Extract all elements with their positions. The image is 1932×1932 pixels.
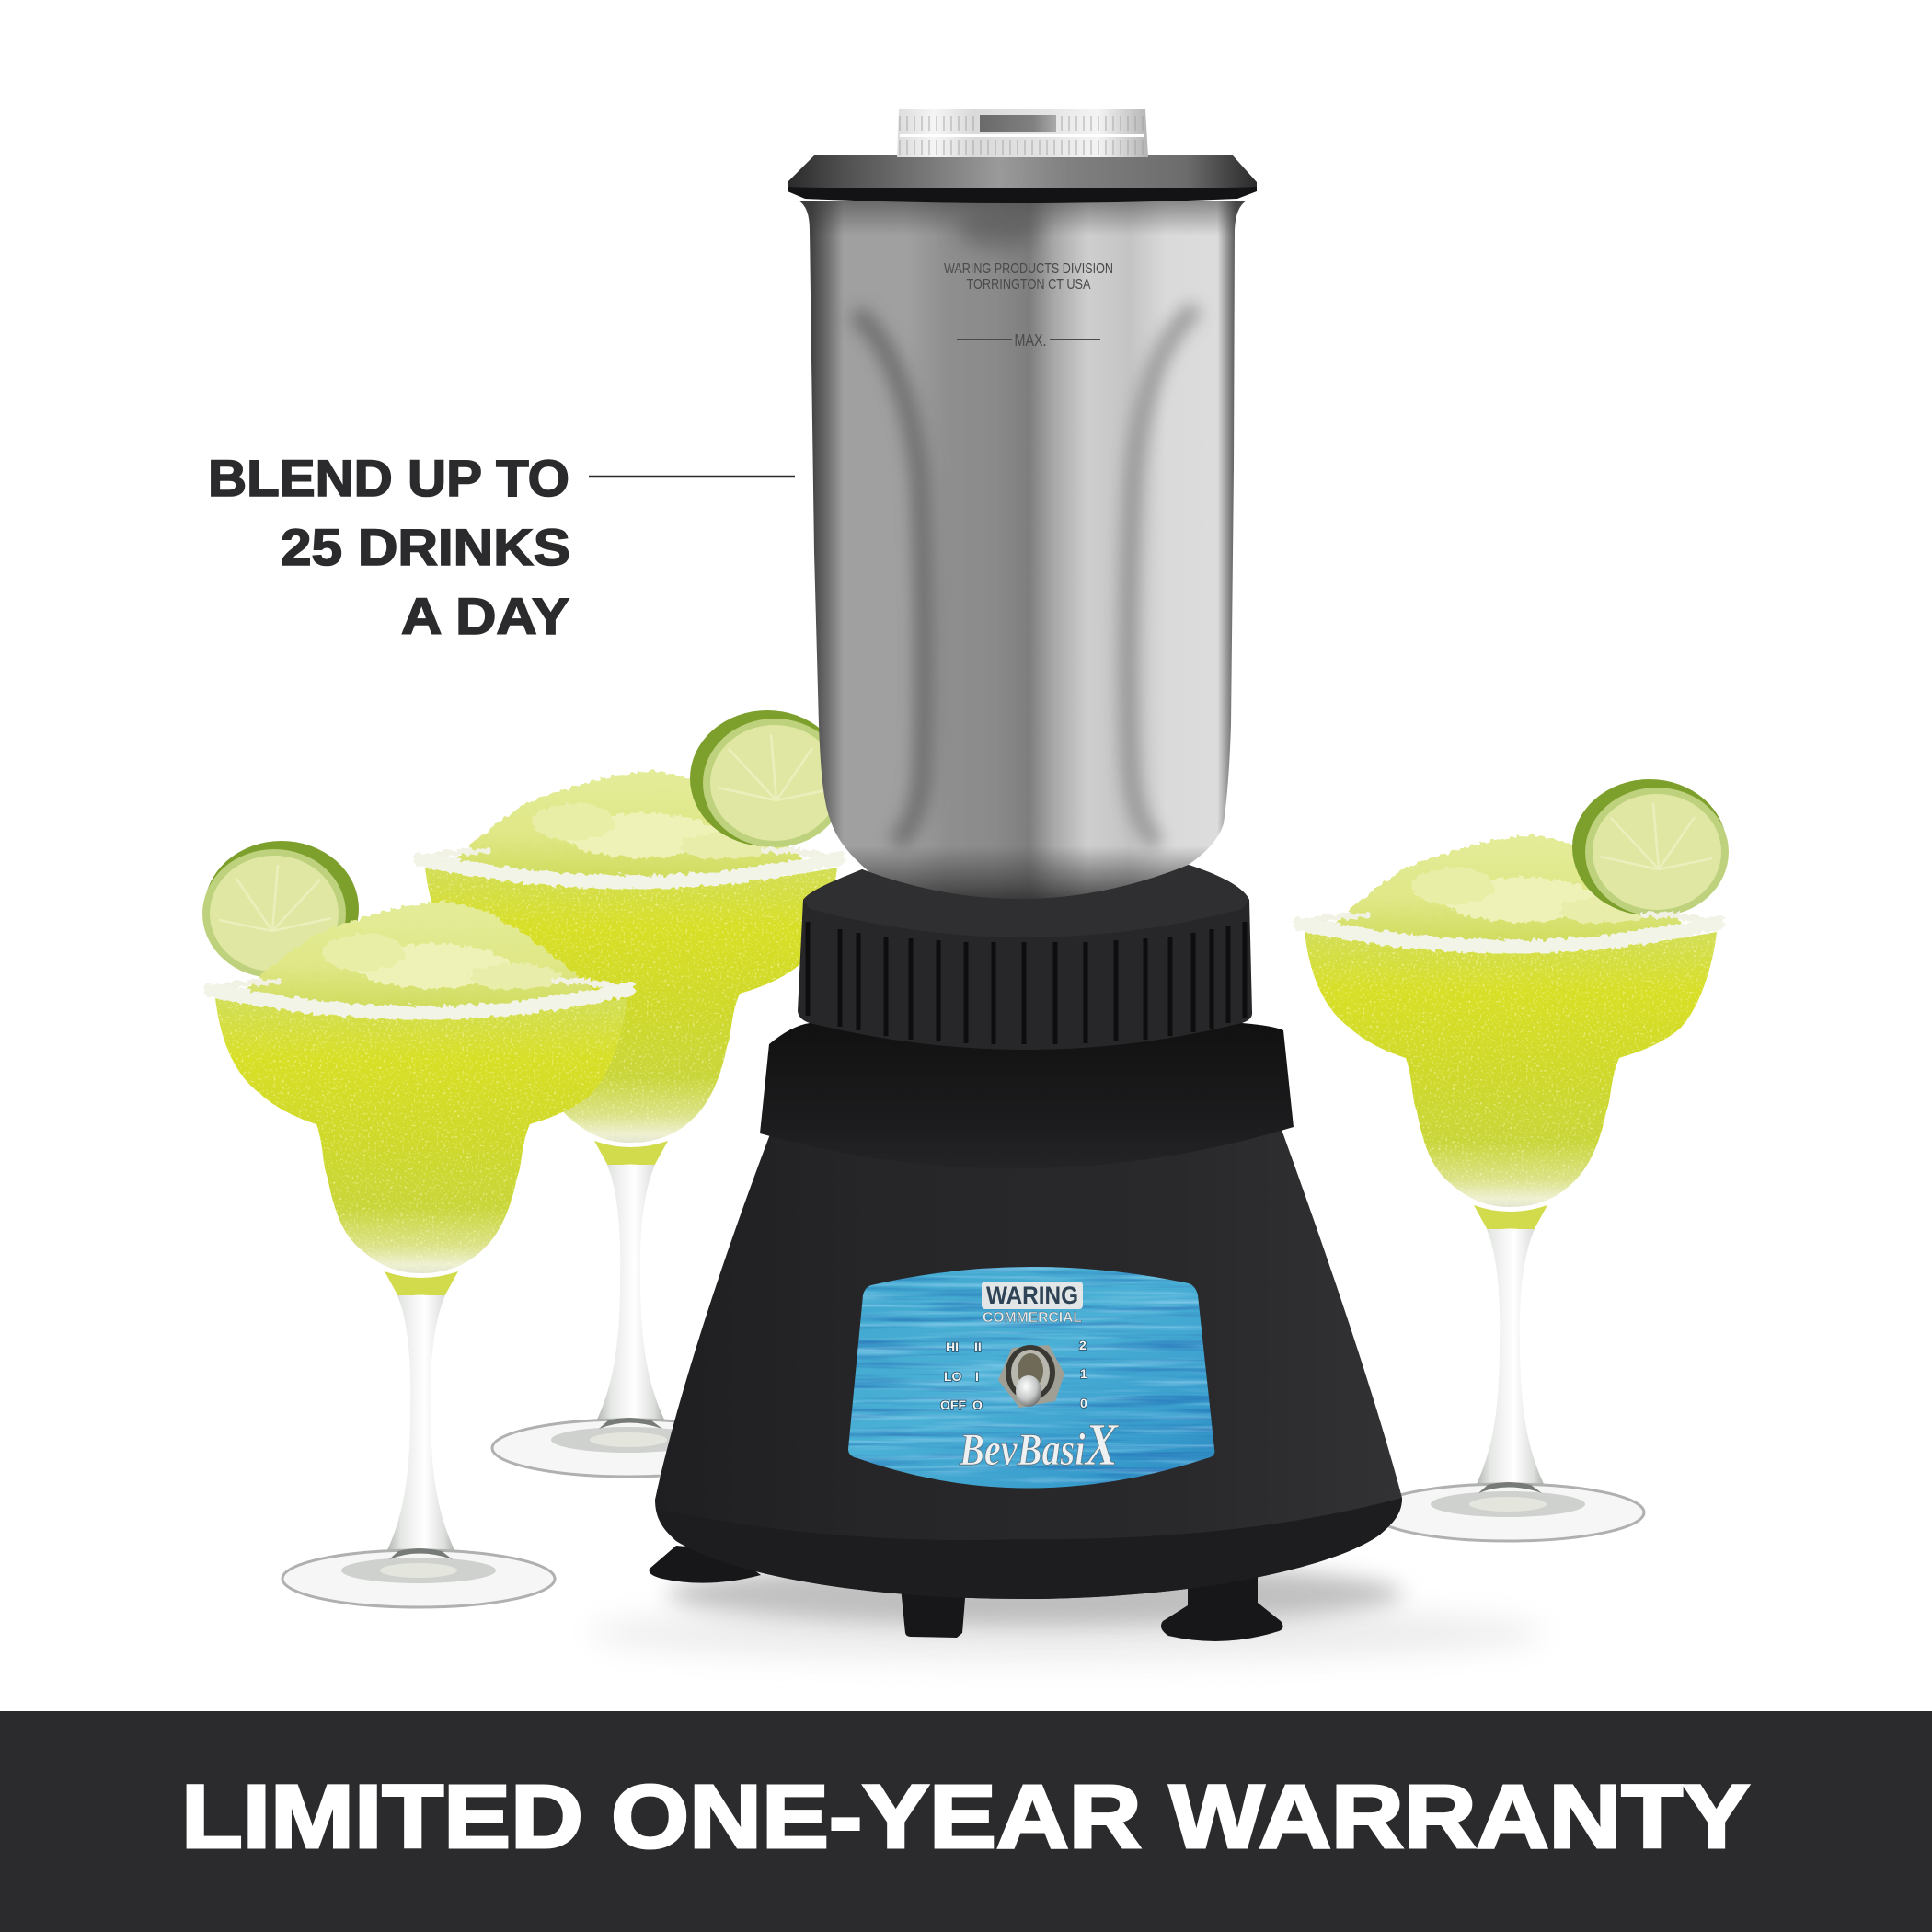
margarita glass: front left	[202, 841, 631, 1607]
blender base cone	[655, 1127, 1402, 1599]
callout line	[589, 476, 795, 477]
switch labels: 2	[1079, 1338, 1087, 1352]
switch labels: I	[975, 1369, 979, 1384]
brand logo: COMMERCIAL	[983, 1310, 1082, 1326]
brand logo	[982, 1282, 1083, 1326]
jar engraving: TORRINGTON CT USA	[966, 277, 1091, 293]
callout text: A DAY	[401, 587, 569, 645]
blender	[650, 109, 1402, 1641]
blender feet	[650, 1546, 1283, 1641]
warranty banner	[0, 1711, 1932, 1932]
callout text: BLEND UP TO	[208, 449, 569, 507]
jar engraving	[944, 261, 1113, 350]
toggle switch	[998, 1345, 1064, 1408]
clear lid cap	[897, 109, 1148, 157]
switch labels: LO	[944, 1369, 962, 1384]
callout text: 25 DRINKS	[281, 518, 570, 576]
margarita glass: right	[1297, 779, 1729, 1541]
jar engraving: MAX.	[1014, 331, 1047, 350]
brand logo: WARING	[986, 1282, 1078, 1309]
warranty text: LIMITED ONE-YEAR WARRANTY	[181, 1766, 1750, 1867]
switch labels: O	[972, 1397, 983, 1412]
blender upper band	[760, 1023, 1294, 1168]
blender collar	[798, 865, 1252, 1050]
blender base lower lip	[657, 1498, 1402, 1599]
switch labels: 1	[1080, 1366, 1087, 1381]
switch labels: II	[974, 1340, 982, 1354]
callout text	[208, 449, 570, 645]
control label	[848, 1267, 1214, 1489]
margarita glass: back	[418, 710, 846, 1477]
stainless steel jar	[799, 201, 1247, 902]
jar lid	[788, 155, 1257, 203]
switch labels: HI	[946, 1340, 959, 1354]
floor shadow	[589, 1562, 1546, 1661]
jar engraving: WARING PRODUCTS DIVISION	[944, 261, 1113, 277]
switch labels: OFF	[940, 1397, 966, 1412]
switch labels	[940, 1338, 1087, 1412]
switch labels: 0	[1080, 1396, 1087, 1410]
product name: BevBasiX	[959, 1411, 1120, 1478]
